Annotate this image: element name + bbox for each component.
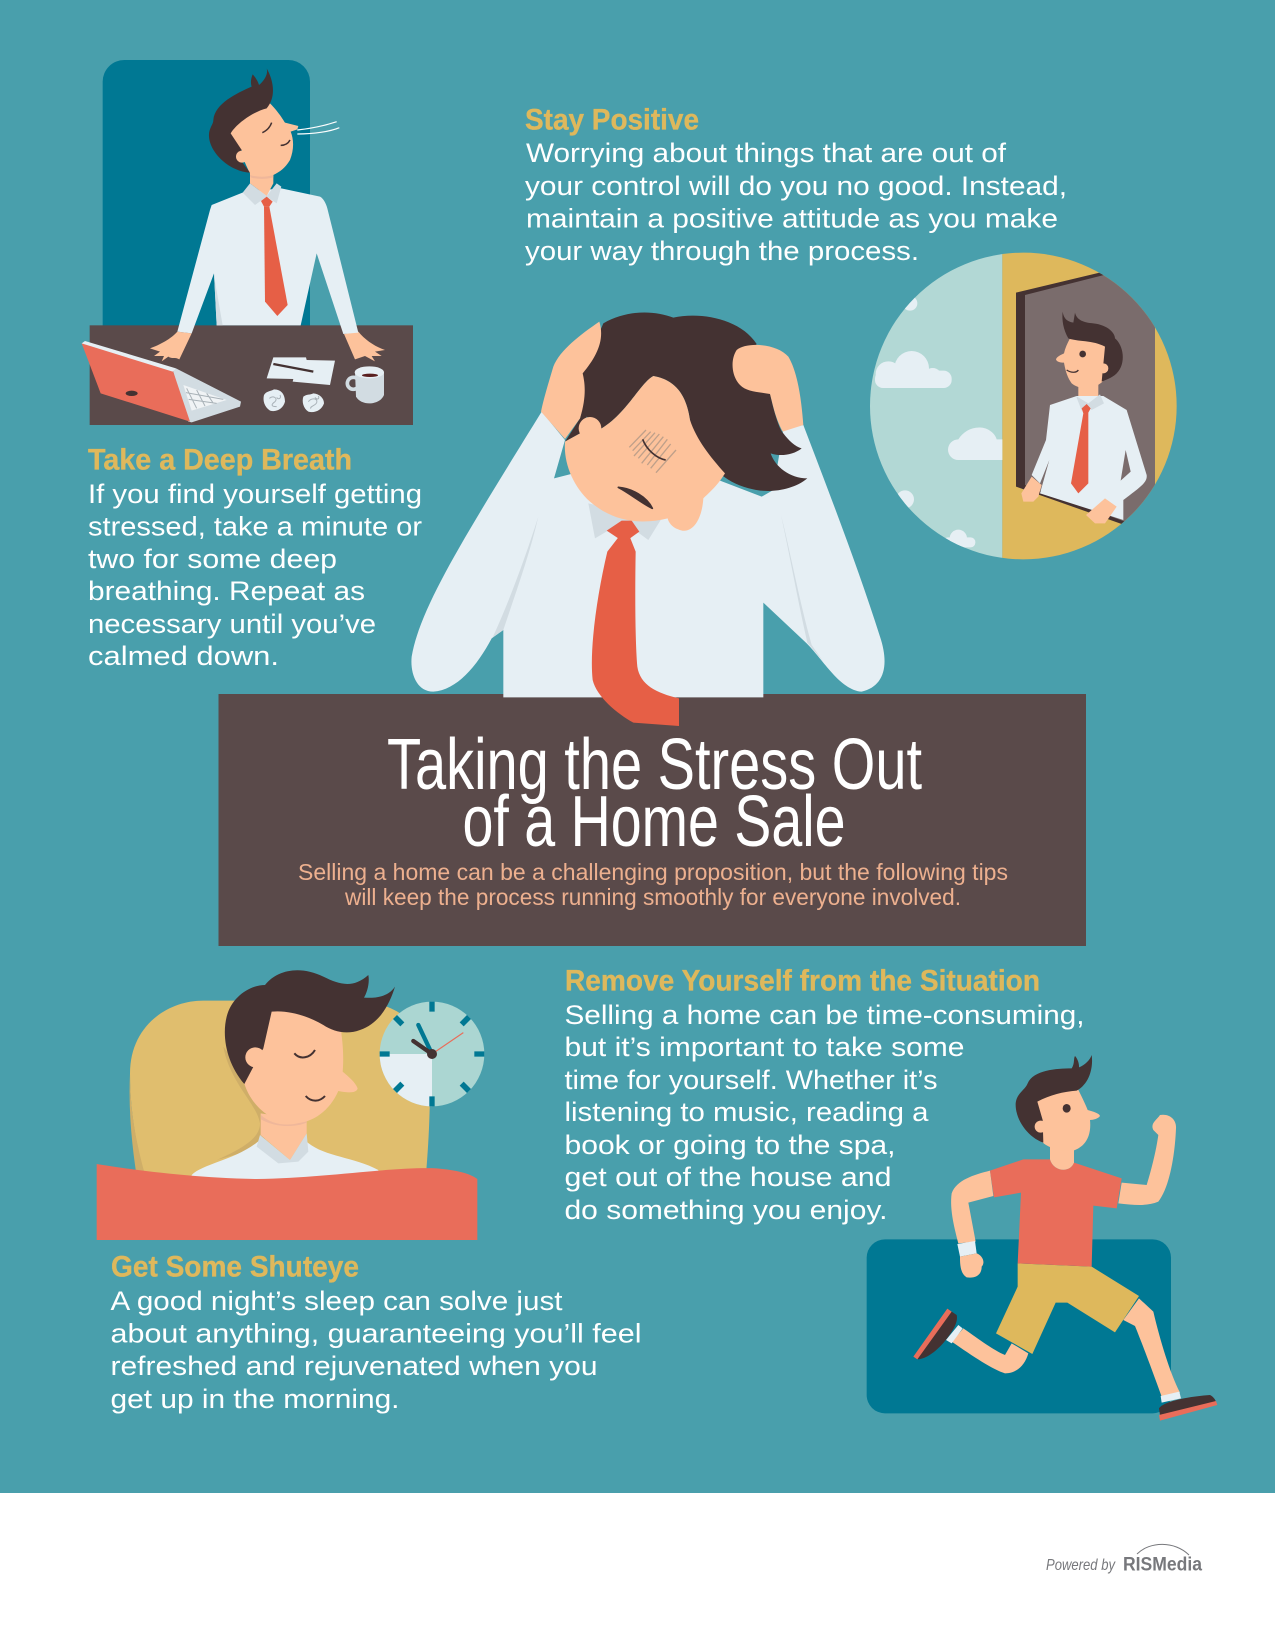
heading: Remove Yourself from the Situation: Remove Yourself from the Situation bbox=[565, 964, 1040, 997]
stress lines and closed eye bbox=[629, 430, 676, 473]
text block: Remove Yourself from the Situation: listening to music, reading a bbox=[564, 1097, 929, 1127]
text block: Remove Yourself from the Situation: Selling a home can be time-consuming, bbox=[564, 1000, 1084, 1030]
illustration: man running bbox=[867, 1055, 1217, 1421]
mouth bbox=[618, 487, 652, 508]
subtitle bbox=[298, 859, 1008, 910]
laptop bbox=[82, 341, 241, 422]
text block: Take a Deep Breath: breathing. Repeat as bbox=[88, 576, 365, 606]
footer logo: Powered by RISMedia: RISMedia bbox=[1123, 1554, 1202, 1576]
hands bbox=[541, 322, 803, 439]
text block: Remove Yourself from the Situation: book or going to the spa, bbox=[564, 1130, 896, 1160]
arms bbox=[951, 1115, 1176, 1278]
man at window bbox=[1021, 312, 1147, 523]
text block: Take a Deep Breath: If you find yourself getting bbox=[88, 479, 422, 509]
illustration: man sleeping with clock bbox=[97, 970, 484, 1240]
text block: Stay Positive bbox=[525, 138, 1067, 266]
text block: Remove Yourself from the Situation: time for yourself. Whether it’s bbox=[564, 1065, 938, 1095]
sleeping man bbox=[192, 970, 395, 1182]
text block: Stay Positive: maintain a positive attitude as you make bbox=[526, 204, 1058, 234]
backdrop panel bbox=[867, 1239, 1171, 1413]
shirt and arms bbox=[411, 412, 885, 697]
text block: Take a Deep Breath: stressed, take a minute or bbox=[88, 512, 422, 542]
t-shirt bbox=[990, 1159, 1122, 1267]
text block: Remove Yourself from the Situation: do something you enjoy. bbox=[564, 1195, 888, 1225]
front leg and shoe bbox=[1123, 1298, 1217, 1421]
footer logo: Powered by RISMedia: Powered by bbox=[1046, 1557, 1116, 1574]
blanket bbox=[97, 1164, 477, 1240]
text block: Take a Deep Breath bbox=[88, 479, 422, 671]
heading: Stay Positive: Stay Positive bbox=[525, 104, 699, 136]
sky and wall circle bbox=[870, 252, 1177, 560]
back leg and shoe bbox=[913, 1309, 1028, 1373]
text block: Take a Deep Breath: two for some deep bbox=[88, 544, 337, 574]
illustration: man looking out window in circle bbox=[870, 252, 1177, 560]
illustration: man taking a deep breath at desk bbox=[82, 60, 413, 425]
text block: Get Some Shuteye: A good night’s sleep can solve just bbox=[110, 1286, 563, 1316]
coffee mug bbox=[347, 366, 384, 403]
text block: Stay Positive: Worrying about things that are out of bbox=[526, 138, 1007, 168]
title bbox=[387, 725, 922, 862]
text block: Get Some Shuteye bbox=[110, 1286, 642, 1414]
footer logo: Powered by RISMedia bbox=[1046, 1544, 1202, 1576]
subtitle: Selling a home can be a challenging proposition, but the following tips bbox=[298, 859, 1008, 885]
pillow bbox=[130, 1001, 430, 1187]
subtitle: will keep the process running smoothly for everyone involved. bbox=[344, 884, 961, 910]
heading: Get Some Shuteye: Get Some Shuteye bbox=[111, 1251, 359, 1284]
text block: Stay Positive: your way through the process. bbox=[525, 236, 919, 266]
illustration: stressed man holding his head bbox=[411, 312, 885, 726]
text block: Remove Yourself from the Situation: get out of the house and bbox=[564, 1162, 892, 1192]
face bbox=[565, 376, 725, 531]
text block: Get Some Shuteye: get up in the morning. bbox=[110, 1384, 400, 1414]
papers and pen bbox=[264, 357, 335, 412]
text block: Remove Yourself from the Situation bbox=[564, 1000, 1084, 1225]
collar bbox=[588, 503, 661, 540]
hair bbox=[565, 312, 807, 491]
text block: Get Some Shuteye: refreshed and rejuvenated when you bbox=[110, 1351, 598, 1381]
text block: Take a Deep Breath: necessary until you’ve bbox=[88, 609, 376, 639]
title: Taking the Stress Out bbox=[387, 725, 922, 805]
title panel bbox=[218, 694, 1086, 946]
text block: Get Some Shuteye: about anything, guaranteeing you’ll feel bbox=[110, 1318, 642, 1348]
shorts bbox=[996, 1263, 1139, 1354]
desk bbox=[90, 325, 413, 425]
head bbox=[1016, 1055, 1100, 1170]
text block: Remove Yourself from the Situation: but it’s important to take some bbox=[564, 1032, 964, 1062]
clock bbox=[380, 1002, 484, 1106]
heading: Take a Deep Breath: Take a Deep Breath bbox=[88, 443, 352, 476]
text block: Take a Deep Breath: calmed down. bbox=[88, 641, 279, 671]
title: of a Home Sale bbox=[462, 782, 846, 862]
tie bbox=[592, 521, 679, 726]
backdrop panel bbox=[103, 60, 310, 327]
man bbox=[150, 68, 385, 361]
text block: Stay Positive: your control will do you no good. Instead, bbox=[525, 171, 1067, 201]
